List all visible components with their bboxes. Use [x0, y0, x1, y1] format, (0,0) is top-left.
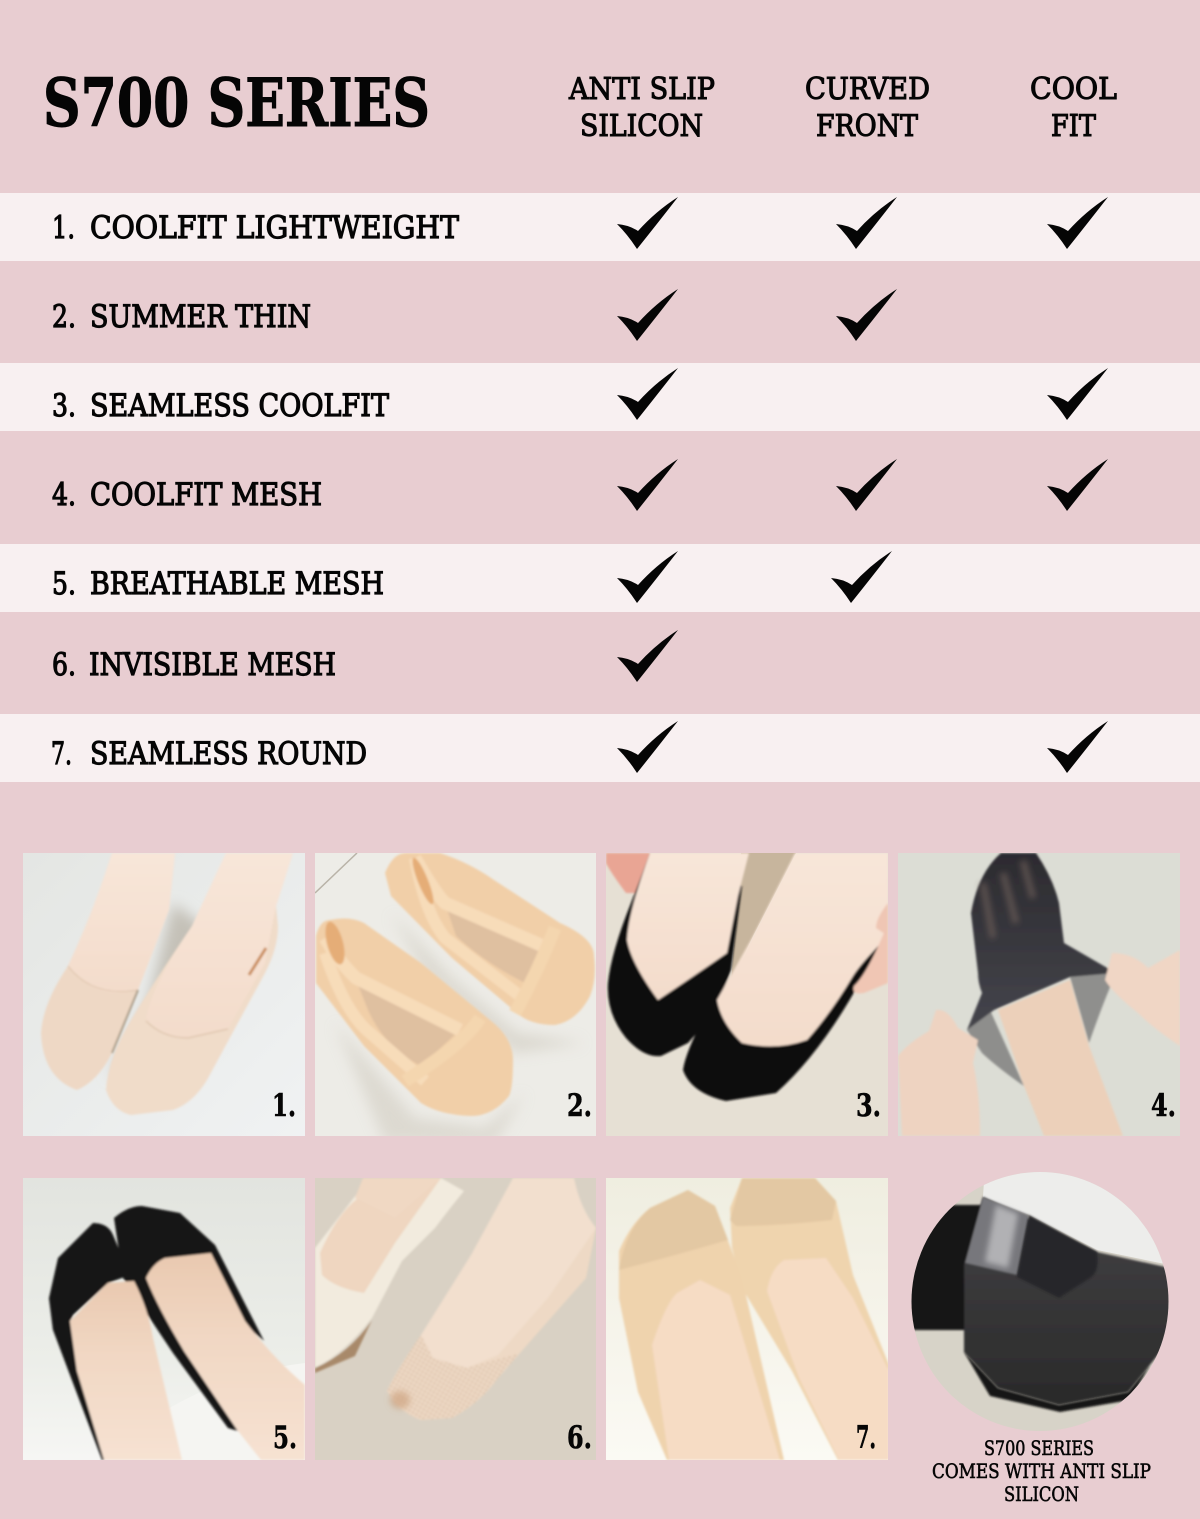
- row 5: breathable mesh: BREATHABLE MESH: [90, 566, 384, 602]
- caption: s700 series comes with anti slip silicon: [932, 1436, 1151, 1506]
- photo 4: coolfit mesh: [898, 853, 1180, 1136]
- row 7: seamless round: [0, 714, 1200, 782]
- number label 5: 5.: [273, 1420, 297, 1456]
- number label 7: 7.: [856, 1420, 876, 1456]
- row 2: summer thin: [52, 289, 897, 341]
- caption: s700 series comes with anti slip silicon: SILICON: [1004, 1482, 1079, 1506]
- column header: cool fit: COOL: [1030, 72, 1117, 107]
- caption: s700 series comes with anti slip silicon: COMES WITH ANTI SLIP: [932, 1459, 1151, 1483]
- column header: anti slip silicon: SILICON: [580, 109, 703, 144]
- row 3: seamless coolfit: SEAMLESS COOLFIT: [90, 388, 389, 424]
- row 3: seamless coolfit: [0, 363, 1200, 431]
- column header: anti slip silicon: ANTI SLIP: [568, 72, 715, 107]
- row 4: coolfit mesh: 4.: [52, 477, 76, 513]
- row 6: invisible mesh: 6.: [52, 647, 76, 683]
- row 1: coolfit lightweight: [0, 193, 1200, 261]
- column header: cool fit: [1030, 72, 1117, 144]
- row 1: coolfit lightweight: COOLFIT LIGHTWEIGHT: [90, 210, 459, 246]
- row 4: coolfit mesh: COOLFIT MESH: [90, 477, 322, 513]
- row 6: invisible mesh: [52, 630, 678, 683]
- row 2: summer thin: 2.: [52, 299, 76, 335]
- row 1: coolfit lightweight: 1.: [52, 210, 75, 246]
- row 6: invisible mesh: INVISIBLE MESH: [89, 647, 336, 683]
- column header: anti slip silicon: [568, 72, 715, 144]
- column header: curved front: [805, 72, 930, 144]
- column header: curved front: FRONT: [816, 109, 918, 144]
- photo 7: seamless round: [606, 1178, 888, 1460]
- panel: comparison table: [0, 72, 1200, 782]
- photo 6: invisible mesh: [315, 1178, 596, 1460]
- photo 2: summer thin: [315, 853, 596, 1136]
- row 5: breathable mesh: [0, 544, 1200, 612]
- caption: s700 series comes with anti slip silicon: S700 SERIES: [984, 1436, 1094, 1460]
- number label 1: 1.: [272, 1088, 296, 1124]
- row 4: coolfit mesh: [52, 459, 1108, 513]
- row 7: seamless round: SEAMLESS ROUND: [90, 736, 367, 772]
- photo 5: breathable mesh: [23, 1178, 305, 1460]
- title: S700 SERIES: [43, 64, 430, 142]
- number label 3: 3.: [856, 1088, 881, 1124]
- row 5: breathable mesh: 5.: [52, 566, 76, 602]
- row 2: summer thin: SUMMER THIN: [90, 299, 311, 335]
- row 7: seamless round: 7.: [51, 736, 72, 772]
- row 3: seamless coolfit: 3.: [52, 388, 76, 424]
- photo 3: seamless coolfit: [606, 853, 888, 1136]
- column header: cool fit: FIT: [1051, 109, 1096, 144]
- column header: curved front: CURVED: [805, 72, 930, 107]
- photo 1: coolfit lightweight: [23, 853, 305, 1136]
- circular detail photo: anti slip silicon: [905, 1165, 1170, 1431]
